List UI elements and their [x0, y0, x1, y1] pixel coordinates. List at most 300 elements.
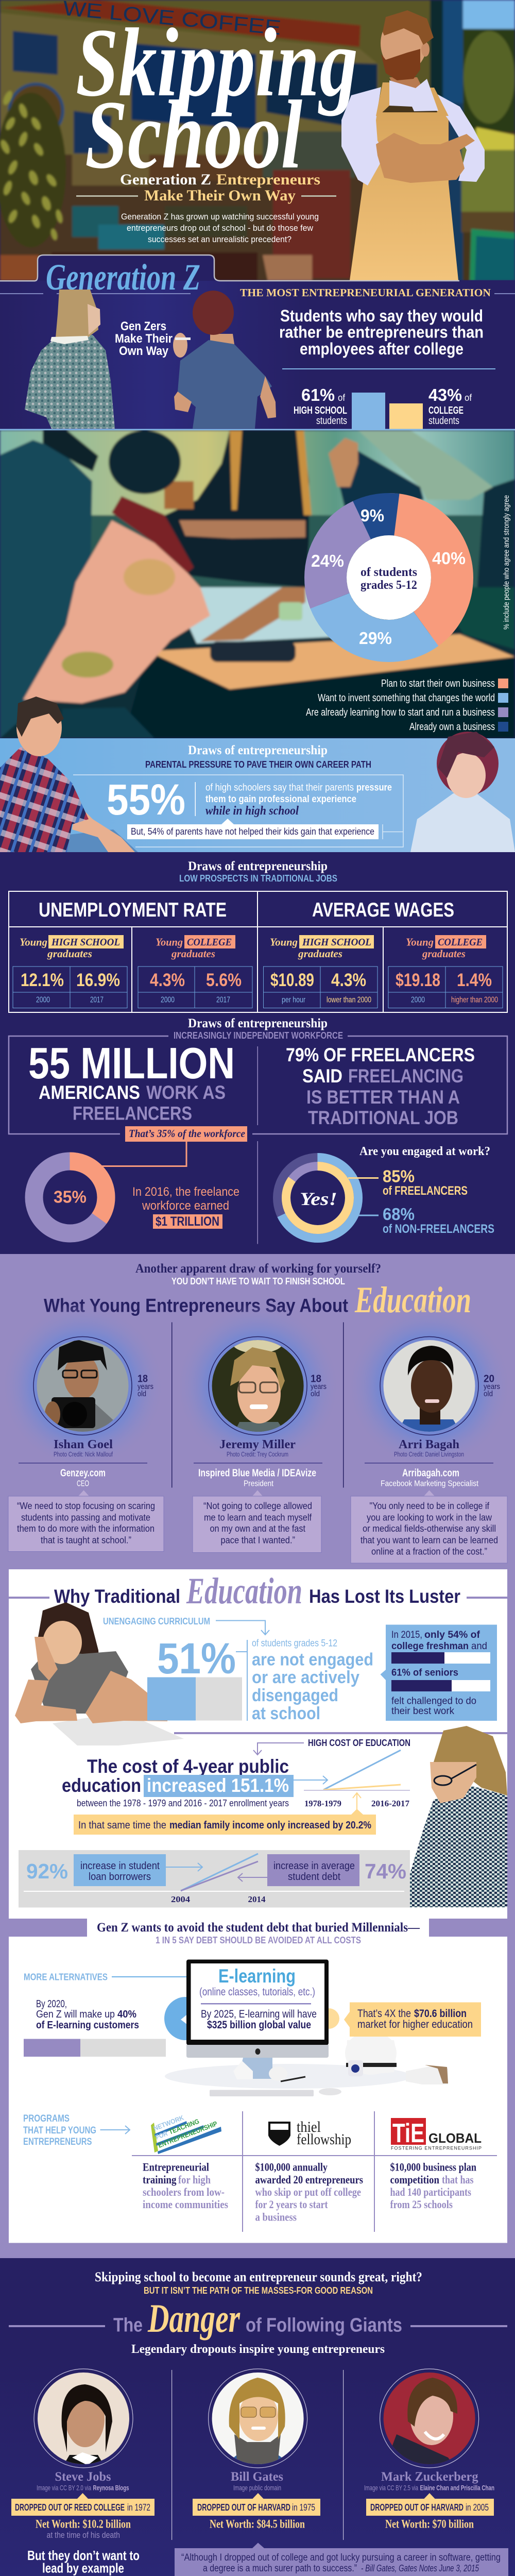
callout: 4x higher education: That’s 4X the: [357, 2008, 411, 2020]
text: NFTE program: training: [143, 2173, 176, 2186]
text: gen z 40%: Gen Z will make up: [36, 2009, 115, 2020]
text: cost of public education: education: [62, 1775, 141, 1796]
donut chart: entrepreneurial intent: 9%: [360, 506, 384, 525]
donut chart: entrepreneurial intent: grades 5-12: [360, 579, 417, 592]
stat: 61% high school: HIGH SCHOOL: [294, 405, 347, 416]
stat: 79% of freelancers: SAID: [302, 1065, 342, 1087]
badge: dropped out of Harvard: [193, 2493, 320, 2516]
text: high schoolers: of high schoolers say that their parents: [205, 782, 354, 793]
net worth: Net Worth: $70 billion: [385, 2517, 474, 2531]
callout: freshman and seniors: only 54% of: [424, 1630, 480, 1640]
logo: network for teaching entrepreneurship: TEACHING: [168, 2117, 200, 2136]
badge: dropped out of Harvard: in 1975: [292, 2502, 315, 2513]
net worth: Net Worth: $10.2 billion: [36, 2517, 131, 2531]
double donut chart: engagement: Yes!: [300, 1189, 337, 1209]
text: cost of public education: increased 151.1%: [147, 1775, 289, 1796]
photo: bored student with book: [15, 1602, 184, 1745]
text: NFTE program: Entrepreneurial: [143, 2161, 209, 2173]
text: gen z 40%: of E-learning customers: [36, 2020, 139, 2031]
age: old: [484, 1389, 493, 1398]
legend: [306, 678, 508, 733]
text: TiE program: $10,000 business plan: [390, 2161, 476, 2173]
stat: 55 million freelancers: FREELANCERS: [73, 1103, 192, 1124]
heading: draws of entrepreneurship: Draws of entrepreneurship: [188, 1016, 328, 1030]
age: old: [311, 1389, 320, 1398]
text: NFTE program: income communities: [143, 2198, 228, 2211]
quote box: “Not going to college allowed: [203, 1501, 312, 1511]
panel: why traditional education lost its luster: [0, 1569, 515, 2243]
image credit: Image public domain: [233, 2483, 281, 2492]
cell: high school wages: $10.89: [270, 970, 314, 990]
badge: dropped out of Reed: [11, 2493, 154, 2516]
callout: freshman and seniors: their best work: [391, 1706, 454, 1717]
quote box: you are looking to work in the law: [367, 1513, 492, 1523]
heading: students who say: Students who say they would: [280, 307, 483, 325]
callout: freshman and seniors: and: [471, 1641, 487, 1652]
heading: what young entrepreneurs say: Education: [354, 1279, 471, 1320]
name: Arri Bagah: [399, 1438, 459, 1451]
intro paragraph: successes set an unrealistic precedent?: [148, 234, 291, 244]
cell: high school wages: [264, 935, 377, 1008]
cell: college wages: 2000: [411, 995, 425, 1005]
subtitle: Entrepreneurs: [216, 171, 320, 188]
subheading: parental pressure: PARENTAL PRESSURE TO PAVE THEIR OWN CAREER PATH: [145, 759, 371, 770]
donut chart: 35%: 35%: [54, 1187, 87, 1207]
line chart: cost vs income: 2016-2017: [371, 1799, 409, 1808]
logo: network for teaching entrepreneurship: FOR: [154, 2129, 169, 2141]
cell: college wages: Young: [406, 936, 434, 948]
header: unemployment rate: UNEMPLOYMENT RATE: [39, 899, 227, 921]
quote box: them to do more with the information: [17, 1523, 154, 1534]
cell: college wages: higher than 2000: [451, 995, 498, 1005]
arrow: [216, 1621, 269, 1635]
hero painted background: [0, 0, 515, 281]
quote box: students into passing and motivate: [21, 1513, 150, 1523]
stat: 79% of freelancers: IS BETTER THAN A: [306, 1087, 460, 1108]
quote box: me to learn and teach myself: [204, 1513, 312, 1523]
text: $1 trillion: [132, 1185, 239, 1229]
cell: high school unemployment: 2000: [36, 995, 50, 1005]
text: thiel program: a business: [255, 2210, 297, 2224]
badge: dropped out of Harvard: in 2005: [466, 2502, 489, 2513]
callout: median family income: In that same time the: [78, 1820, 166, 1831]
intro paragraph: entrepreneurs drop out of school - but do those few: [127, 223, 314, 233]
text: $1 trillion: $1 TRILLION: [156, 1214, 219, 1229]
cell: college wages: 1.4%: [457, 970, 492, 990]
heading: Generation Z script: Generation Z: [46, 257, 200, 298]
text: gen zers make their own way: Own Way: [119, 344, 169, 358]
label: unengaging curriculum: UNENGAGING CURRICULUM: [103, 1616, 210, 1626]
image credit: Image via CC BY 2.5 via: [364, 2483, 418, 2492]
label: programs: PROGRAMS: [23, 2113, 70, 2124]
panel: student loans: 92%: [26, 1859, 68, 1883]
stat: 61% high school: [294, 385, 347, 427]
cell: college unemployment: 4.3%: [150, 970, 185, 990]
donut chart: 35%: [34, 1161, 106, 1233]
badge: dropped out of Harvard: [366, 2493, 494, 2516]
callout: freshman and seniors: In 2015,: [391, 1630, 422, 1640]
profile: Ishan Goel: [0, 1303, 165, 1552]
company: Inspired Blue Media / IDEAvize: [198, 1467, 316, 1479]
note: at the time of his death: [46, 2530, 120, 2540]
heading: the most entrepreneurial generation: THE MOST ENTREPRENEURIAL GENERATION: [240, 286, 491, 299]
text: TiE program: [390, 2161, 476, 2211]
portrait: [383, 1340, 476, 1433]
heading: students who say: employees after college: [300, 340, 464, 358]
stat: 61% high school: students: [316, 415, 347, 427]
plant leaves: [0, 89, 64, 241]
text: high schoolers: them to gain professional experience: [205, 794, 356, 805]
cell: college unemployment: Young: [156, 936, 183, 948]
legend: Already own a business: [409, 721, 495, 733]
profile: Arri Bagah: [347, 1303, 512, 1563]
text: gen z 40%: 40%: [117, 2009, 136, 2020]
heading: what young entrepreneurs say: [44, 1279, 471, 1320]
stat: 43% college: COLLEGE: [428, 405, 464, 416]
double donut chart: engagement: [277, 1157, 358, 1239]
text: gen zers make their own way: Gen Zers: [121, 319, 166, 333]
quote box: [193, 1490, 321, 1553]
text: don't lead by example: [27, 2548, 140, 2576]
stat: 79% of freelancers: [286, 1044, 475, 1128]
note: include people who agree: % include people who agree and strongly agree: [502, 495, 511, 630]
tab: generation z: [35, 255, 459, 281]
subheading: independent workforce: INCREASINGLY INDEPENDENT WORKFORCE: [174, 1030, 343, 1041]
logo: thiel fellowship: thiel: [297, 2119, 321, 2136]
text: not engaged: [252, 1638, 373, 1723]
text: not engaged: of students grades 5-12: [252, 1638, 337, 1649]
heading: students who say: [279, 307, 484, 358]
painted photo of students: [0, 430, 515, 738]
text: don't lead by example: But they don’t want to: [27, 2548, 140, 2563]
heading: are you engaged: Are you engaged at work?: [359, 1145, 490, 1158]
logo: TiE global: TiE: [392, 2119, 424, 2148]
panel: generation Z students: [0, 255, 515, 429]
quote box: pace that I wanted.”: [220, 1535, 295, 1546]
callout: freshman and seniors: college freshman: [391, 1641, 469, 1652]
age: [138, 1374, 153, 1398]
quote: Bill Gates: a degree is a much surer path to success.”: [203, 2563, 357, 2574]
panel: traditional jobs and freelancing: [0, 852, 515, 1254]
text: NFTE program: [143, 2161, 228, 2211]
donut chart: entrepreneurial intent: 29%: [359, 629, 392, 648]
cell: college unemployment: [138, 935, 252, 1008]
badge: dropped out of Reed: in 1972: [127, 2502, 150, 2513]
stat: 85% of freelancers: [348, 1166, 468, 1198]
profile: Steve Jobs: Reynosa Blogs: [93, 2483, 129, 2492]
text: not engaged: disengaged: [252, 1686, 338, 1705]
heading: draws of entrepreneurship: Draws of entrepreneurship: [188, 743, 328, 757]
logo: TiE global: GLOBAL: [428, 2130, 482, 2146]
subtitle: Generation Z: [120, 171, 211, 188]
photo credit: Photo Credit: Nick Mallouf: [54, 1450, 113, 1458]
panel: student loans: increase in student: [80, 1860, 160, 1872]
role: CEO: [77, 1480, 89, 1488]
text: TiE program: from 25 schools: [390, 2198, 453, 2211]
cell: high school unemployment: [13, 935, 127, 1008]
text: gen z 40%: [24, 1998, 166, 2057]
panel: students photo with donut: [0, 430, 515, 738]
subtitle: Make Their Own Way: [144, 187, 296, 204]
heading: why traditional education: [9, 1570, 507, 1612]
header: average wages: AVERAGE WAGES: [312, 899, 454, 921]
role: President: [244, 1480, 273, 1488]
heading: the danger of following giants: The: [113, 2314, 143, 2336]
panel: student loans: 2014: [248, 1894, 266, 1904]
portrait: [37, 2372, 131, 2468]
text: TiE program: competition: [390, 2173, 439, 2186]
cell: high school unemployment: 12.1%: [21, 970, 64, 990]
text: thiel program: [255, 2161, 363, 2224]
text: NFTE program: for high: [178, 2173, 211, 2186]
panel: student loans: 74%: [365, 1859, 406, 1883]
callout: median family income: median family income only increased by 20.2%: [169, 1820, 371, 1831]
age: 20: [484, 1374, 494, 1385]
quote box: on my own and at the fast: [210, 1523, 305, 1534]
cell: high school wages: graduates: [298, 947, 342, 960]
text: high schoolers: [205, 782, 392, 818]
screen: e-learning: (online classes, tutorials, etc.): [199, 1986, 315, 1998]
quote box: that is taught at school.”: [41, 1535, 131, 1546]
age: years: [484, 1382, 500, 1391]
age: years: [138, 1382, 153, 1391]
quote: Bill Gates: [175, 2543, 508, 2576]
cell: college unemployment: 2000: [161, 995, 175, 1005]
stat: 43% college: students: [428, 415, 459, 427]
text: TiE program: had 140 participants: [390, 2185, 471, 2198]
badge: dropped out of Harvard: DROPPED OUT OF HARVARD: [197, 2502, 290, 2513]
donut chart: entrepreneurial intent: of students: [360, 566, 417, 579]
cell: high school unemployment: 16.9%: [76, 970, 120, 990]
callout: 35% of the workforce: That’s 35% of the workforce: [129, 1127, 245, 1140]
line chart: cost vs income: 1978-1979: [304, 1799, 341, 1808]
logo: network for teaching entrepreneurship: NETWORK: [152, 2113, 185, 2132]
cell: high school wages: Young: [270, 936, 298, 948]
name: Ishan Goel: [54, 1438, 113, 1451]
heading: another apparent draw: Another apparent draw of working for yourself?: [135, 1262, 381, 1276]
photo: woman facing board: [25, 290, 115, 429]
profile: Mark Zuckerberg: [364, 2369, 494, 2531]
subheading: finish school: YOU DON’T HAVE TO WAIT TO FINISH SCHOOL: [171, 1276, 345, 1286]
heading: the danger of following giants: [9, 2296, 507, 2341]
text: TiE program: that has: [442, 2173, 474, 2186]
stat: 55%: 55%: [107, 775, 185, 824]
name: Bill Gates: [231, 2470, 283, 2484]
quote box: or medical fields-otherwise any skill: [363, 1523, 496, 1534]
portrait: [36, 1340, 130, 1437]
label: programs: ENTREPRENEURS: [23, 2137, 92, 2147]
name: Mark Zuckerberg: [381, 2470, 478, 2484]
text: gen zers make their own way: Make Their: [115, 332, 173, 346]
heading: the danger of following giants: of Following Giants: [246, 2314, 402, 2336]
stat: 51%: 51%: [157, 1634, 236, 1683]
label: high cost of education: HIGH COST OF EDUCATION: [308, 1738, 410, 1748]
cell: high school unemployment: 2017: [90, 995, 104, 1005]
subheading: path of the masses: BUT IT ISN’T THE PATH OF THE MASSES-FOR GOOD REASON: [144, 2285, 373, 2296]
subheading: legendary dropouts: Legendary dropouts inspire young entrepreneurs: [131, 2343, 385, 2356]
stat: 55 million freelancers: AMERICANS: [39, 1082, 140, 1103]
title: School: School: [85, 81, 302, 189]
quote box: [351, 1490, 507, 1563]
heading: the danger of following giants: Danger: [147, 2296, 240, 2341]
intro paragraph: Generation Z has grown up watching successful young: [121, 212, 319, 222]
company: Arribagah.com: [402, 1467, 459, 1479]
stat: 61% high school: of: [338, 393, 346, 403]
stat: 43% college: 43%: [428, 385, 462, 404]
text: $1 trillion: workforce earned: [142, 1199, 229, 1213]
text: not engaged: are not engaged: [252, 1650, 373, 1669]
heading: why traditional education: Why Traditional: [54, 1586, 180, 1607]
photo: person in plaid shirt: [0, 697, 138, 852]
logo: TiE global: FOSTERING ENTREPRENEURSHIP: [391, 2145, 482, 2150]
text: not engaged: at school: [252, 1704, 320, 1723]
quote box: "You only need to be in college if: [370, 1501, 490, 1511]
quote box: that you want to learn can be learned: [360, 1535, 498, 1546]
heading: what young entrepreneurs say: What Young Entrepreneurs Say About: [44, 1295, 348, 1316]
stat: 79% of freelancers: TRADITIONAL JOB: [308, 1107, 458, 1128]
arrow: [253, 1743, 304, 1755]
text: thiel program: for 2 years to start: [255, 2198, 328, 2211]
panel: student loans: student debt: [288, 1871, 340, 1883]
portrait: [383, 2372, 476, 2468]
cell: college wages: [388, 935, 503, 1008]
line chart: cost vs income: [304, 1750, 410, 1808]
panel: student loans: increase in average: [273, 1860, 355, 1872]
photo: man in beanie writing: [173, 291, 276, 429]
logo: network for teaching entrepreneurship: ENTREPRENEURSHIP: [157, 2120, 218, 2149]
photo credit: Photo Credit: Trey Cockrum: [227, 1450, 288, 1458]
stat: 79% of freelancers: 79% OF FREELANCERS: [286, 1044, 475, 1065]
bar chart: students: [352, 393, 423, 429]
callout: 35% of the workforce: [102, 1126, 247, 1166]
age: years: [311, 1382, 327, 1391]
quote: Bill Gates: - Bill Gates, Gates Notes June 3, 2015: [361, 2563, 479, 2573]
screen: e-learning: [164, 1960, 339, 2058]
text: cost of public education: between the 1978 - 1979 and 2016 - 2017 enrollment years: [77, 1798, 289, 1808]
badge: dropped out of Harvard: DROPPED OUT OF HARVARD: [370, 2502, 464, 2513]
callout: 54% of parents: [127, 819, 403, 839]
age: old: [138, 1389, 146, 1398]
panel: student loans: [19, 1850, 410, 1907]
cell: high school wages: per hour: [282, 995, 306, 1005]
profile: Bill Gates: [193, 2369, 320, 2531]
logo: thiel fellowship: fellowship: [297, 2131, 351, 2148]
cell: college wages: graduates: [422, 947, 466, 960]
photo: woman with red hair: [410, 732, 515, 852]
cell: high school unemployment: graduates: [47, 947, 92, 960]
cell: college wages: $19.18: [396, 970, 440, 990]
profile: Jeremy Miller: [176, 1303, 340, 1553]
arrow: [100, 2126, 130, 2134]
text: cost of public education: The cost of 4-year public: [87, 1756, 289, 1777]
text: gen z 40%: By 2020,: [36, 1998, 67, 2010]
text: cost of public education: [62, 1756, 328, 1808]
cell: high school wages: HIGH SCHOOL: [302, 937, 371, 948]
stat: 55 million freelancers: 55 MILLION: [28, 1039, 235, 1088]
cell: high school wages: 4.3%: [331, 970, 366, 990]
name: Jeremy Miller: [219, 1438, 296, 1451]
donut chart: entrepreneurial intent: [311, 506, 466, 648]
cell: college unemployment: 2017: [216, 995, 230, 1005]
callout: freshman and seniors: felt challenged to do: [391, 1696, 476, 1706]
text: not engaged: or are actively: [252, 1668, 359, 1687]
portrait: [211, 2372, 305, 2468]
text: NFTE program: schoolers from low-: [143, 2185, 225, 2198]
label: programs: THAT HELP YOUNG: [23, 2125, 96, 2136]
net worth: Net Worth: $84.5 billion: [210, 2517, 305, 2531]
logo: thiel fellowship: [268, 2119, 351, 2148]
name: Steve Jobs: [55, 2470, 111, 2484]
quote box: [8, 1490, 164, 1552]
callout: 54% of parents: But, 54% of parents have not helped their kids gain that experience: [131, 826, 374, 837]
photo credit: Photo Credit: Daniel Livingston: [394, 1450, 464, 1458]
stat: 55 million freelancers: WORK AS: [146, 1082, 226, 1103]
portrait: [211, 1331, 305, 1437]
panel: student loans: 2004: [171, 1894, 191, 1904]
panel: young entrepreneurs and education: [0, 1254, 515, 2258]
stat: 51%: [147, 1634, 247, 1721]
heading: students who say: rather be entrepreneurs than: [279, 323, 484, 341]
donut chart: entrepreneurial intent: 24%: [311, 551, 344, 570]
cell: high school unemployment: HIGH SCHOOL: [51, 937, 120, 948]
text: high schoolers: while in high school: [205, 804, 299, 818]
stat: 85% of freelancers: 85%: [383, 1166, 415, 1186]
subtitle: [76, 171, 336, 204]
panel: danger of following giants and dropouts: [0, 2258, 515, 2576]
desk objects: [165, 2031, 448, 2096]
arrow: [112, 1973, 214, 1981]
badge: dropped out of Reed: DROPPED OUT OF REED COLLEGE: [15, 2502, 125, 2513]
stat: 79% of freelancers: FREELANCING: [348, 1065, 464, 1087]
table: unemployment and wages: [9, 891, 507, 1012]
intro paragraph: [121, 212, 319, 244]
label: programs: [23, 2113, 96, 2147]
callout: median family income: [74, 1793, 376, 1835]
title: Skipping: Skipping: [76, 9, 358, 117]
age: 18: [138, 1374, 148, 1385]
text: don't lead by example: lead by example: [42, 2561, 124, 2576]
heading: why traditional education: Has Lost Its Luster: [309, 1586, 460, 1607]
quote box: online at a fraction of the cost.”: [371, 1547, 487, 1557]
stat: 43% college: of: [465, 393, 472, 403]
text: thiel program: who skip or put off college: [255, 2185, 361, 2198]
subheading: low prospects: LOW PROSPECTS IN TRADITIONAL JOBS: [179, 873, 337, 884]
role: Facebook Marketing Specialist: [381, 1480, 478, 1488]
age: [311, 1374, 327, 1398]
quote box: “We need to stop focusing on scaring: [17, 1501, 155, 1511]
cell: college wages: COLLEGE: [438, 937, 483, 948]
callout: 4x higher education: [344, 2002, 481, 2037]
stat: 43% college: [428, 385, 472, 427]
panel: student loans: loan borrowers: [89, 1871, 151, 1883]
text: $1 trillion: In 2016, the freelance: [132, 1185, 239, 1199]
age: [484, 1374, 500, 1398]
age: 18: [311, 1374, 321, 1385]
cell: college unemployment: graduates: [171, 947, 215, 960]
stat: 55 million freelancers: [28, 1039, 235, 1124]
screen: e-learning: E-learning: [218, 1965, 296, 1987]
heading: gen z avoids debt: Gen Z wants to avoid the student debt that buried Millennials—: [97, 1921, 420, 1935]
stat: 61% high school: 61%: [301, 385, 335, 404]
cell: college unemployment: COLLEGE: [187, 937, 232, 948]
screen: e-learning: By 2025, E-learning will have: [201, 2008, 317, 2020]
panel: hero photo of coffee shop: [0, 0, 515, 281]
text: gen zers make their own way: [115, 319, 173, 358]
callout: 4x higher education: market for higher education: [357, 2019, 473, 2030]
heading: why traditional education: Education: [186, 1570, 302, 1612]
profile: Steve Jobs: [11, 2369, 154, 2540]
stat: 68% of non-freelancers: 68%: [383, 1205, 415, 1224]
